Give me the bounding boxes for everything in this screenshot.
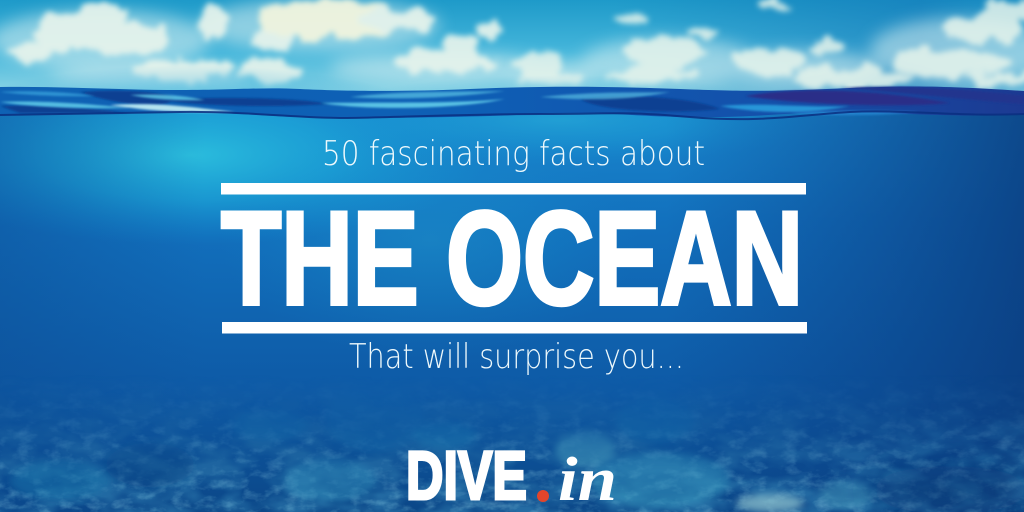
logo: DIVE.in: in [558, 446, 617, 512]
bottom rule [222, 322, 807, 334]
sky background [0, 0, 1024, 95]
intro line: 50 fascinating facts about [322, 134, 705, 174]
water surface waves [0, 87, 1024, 119]
top rule [221, 183, 806, 194]
soft cloud haze [0, 0, 1024, 89]
main title: THE OCEAN [221, 185, 803, 333]
coral reef [0, 400, 1024, 512]
logo: DIVE.in: DIVE [406, 437, 527, 512]
subtitle line: That will surprise you... [349, 337, 684, 377]
clouds [8, 0, 1024, 88]
